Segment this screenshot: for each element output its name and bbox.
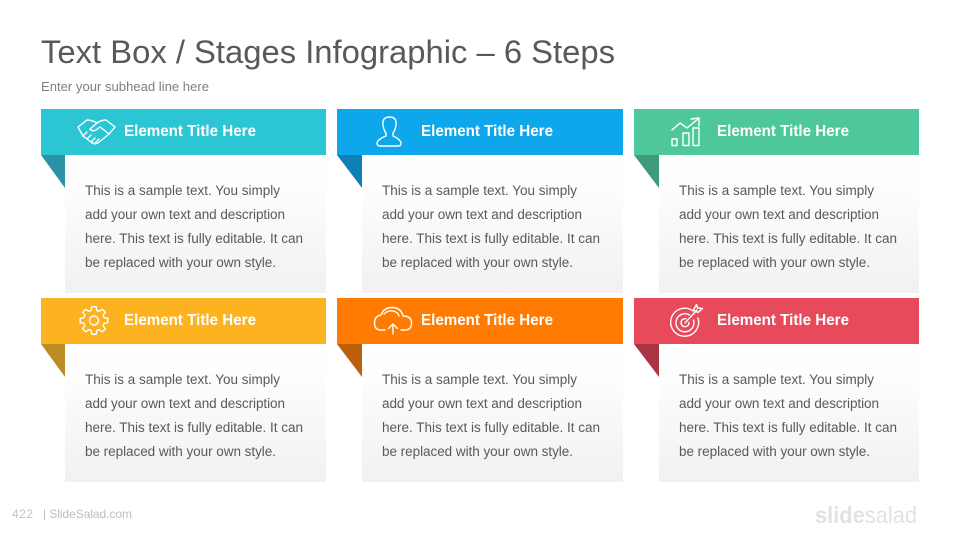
fold 6 <box>634 344 659 377</box>
header bar 5 <box>337 298 623 344</box>
panel: step 4 amber <box>41 298 326 482</box>
body text 1 <box>85 183 303 270</box>
footer page number: 422 <box>12 507 33 521</box>
icon: handshake <box>78 120 115 144</box>
panel: step 2 blue <box>337 109 623 293</box>
body text 5: here. This text is fully editable. It can <box>382 420 600 435</box>
body text 4: be replaced with your own style. <box>85 444 276 459</box>
panel: step 3 green <box>634 109 919 293</box>
body text 6 <box>679 372 897 459</box>
body text 3: be replaced with your own style. <box>679 255 870 270</box>
header bar 1 <box>41 109 326 155</box>
icon: target <box>671 304 702 336</box>
body text 2: be replaced with your own style. <box>382 255 573 270</box>
title 2: Element Title Here <box>421 123 553 140</box>
logo wordmark: slidesalad <box>815 502 917 528</box>
header bar 6 <box>634 298 919 344</box>
body text 3: add your own text and description <box>679 207 879 222</box>
body card 1 <box>65 155 326 293</box>
fold 2 <box>337 155 362 188</box>
body text 3 <box>679 183 897 270</box>
body card 2 <box>362 155 623 293</box>
body text 5: add your own text and description <box>382 396 582 411</box>
footer source: | SlideSalad.com <box>43 507 132 521</box>
body text 3: here. This text is fully editable. It can <box>679 231 897 246</box>
fold 3 <box>634 155 659 188</box>
icon: gear <box>80 307 108 334</box>
body text 1: This is a sample text. You simply <box>85 183 280 198</box>
body text 4 <box>85 372 303 459</box>
body text 4: here. This text is fully editable. It can <box>85 420 303 435</box>
title 1: Element Title Here <box>124 123 256 140</box>
fold 4 <box>41 344 65 377</box>
body text 1: here. This text is fully editable. It can <box>85 231 303 246</box>
panel: step 6 red <box>634 298 919 482</box>
icon: cloud upload <box>374 308 412 334</box>
body text 5: This is a sample text. You simply <box>382 372 577 387</box>
icon: growth chart <box>672 118 699 146</box>
body card 5 <box>362 344 623 482</box>
title: Text Box / Stages Infographic – 6 Steps <box>41 34 615 70</box>
body text 4: This is a sample text. You simply <box>85 372 280 387</box>
panel: step 5 orange <box>337 298 623 482</box>
header bar 4 <box>41 298 326 344</box>
title 3: Element Title Here <box>717 123 849 140</box>
header bar 3 <box>634 109 919 155</box>
body text 5 <box>382 372 600 459</box>
body text 3: This is a sample text. You simply <box>679 183 874 198</box>
title 5: Element Title Here <box>421 312 553 329</box>
title 6: Element Title Here <box>717 312 849 329</box>
fold 1 <box>41 155 65 188</box>
body card 3 <box>659 155 919 293</box>
body text 1: be replaced with your own style. <box>85 255 276 270</box>
subhead: Enter your subhead line here <box>41 79 209 94</box>
body text 2: add your own text and description <box>382 207 582 222</box>
header bar 2 <box>337 109 623 155</box>
body card 6 <box>659 344 919 482</box>
body text 5: be replaced with your own style. <box>382 444 573 459</box>
body text 6: add your own text and description <box>679 396 879 411</box>
body text 4: add your own text and description <box>85 396 285 411</box>
title 4: Element Title Here <box>124 312 256 329</box>
body text 6: be replaced with your own style. <box>679 444 870 459</box>
body text 1: add your own text and description <box>85 207 285 222</box>
body text 2: here. This text is fully editable. It can <box>382 231 600 246</box>
body text 2: This is a sample text. You simply <box>382 183 577 198</box>
panel: step 1 teal <box>41 109 326 293</box>
body text 6: here. This text is fully editable. It can <box>679 420 897 435</box>
body card 4 <box>65 344 326 482</box>
icon: person <box>377 117 401 146</box>
body text 2 <box>382 183 600 270</box>
fold 5 <box>337 344 362 377</box>
body text 6: This is a sample text. You simply <box>679 372 874 387</box>
